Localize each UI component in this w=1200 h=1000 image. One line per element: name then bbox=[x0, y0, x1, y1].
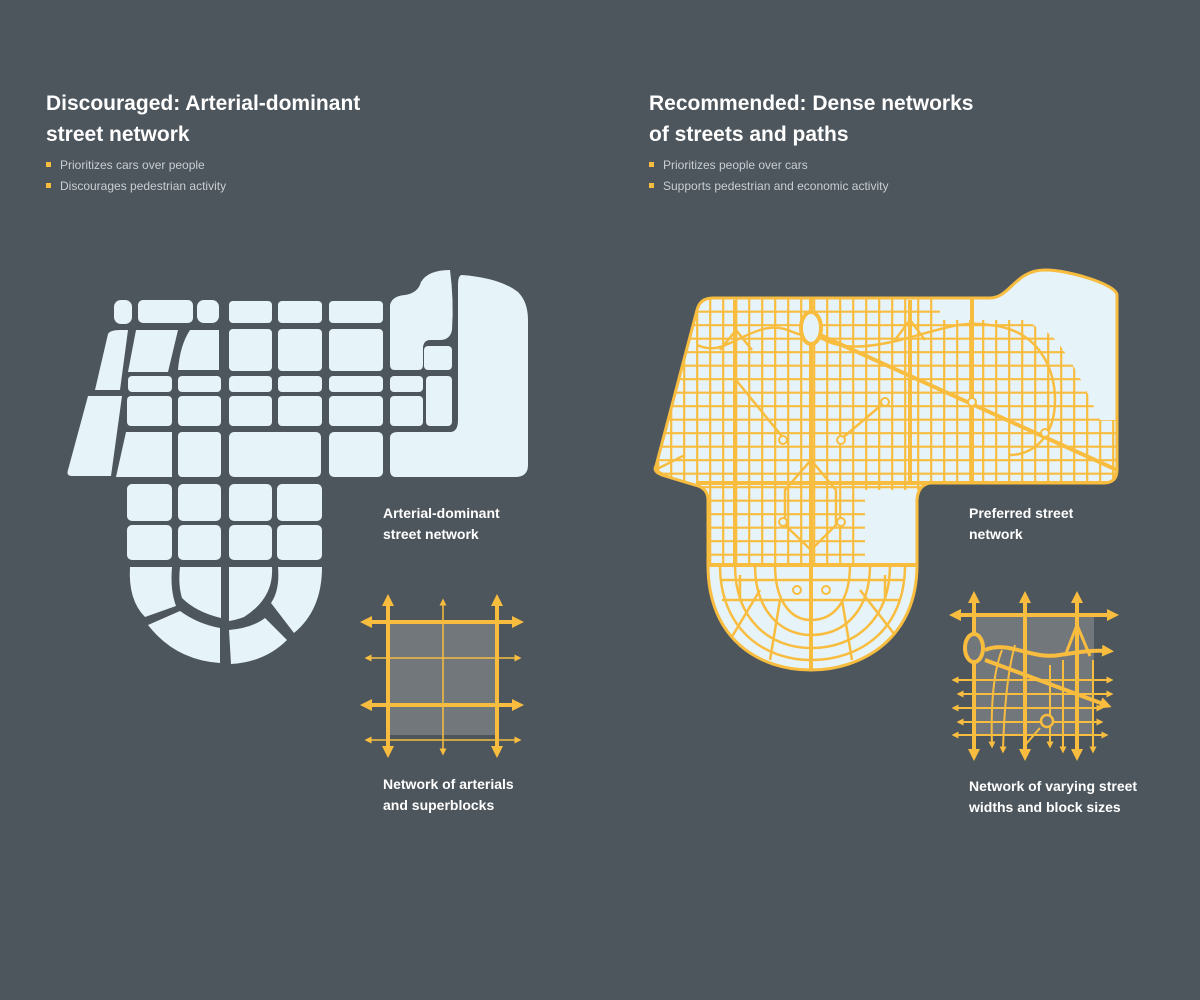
label: preferred street network: Preferred street bbox=[969, 505, 1073, 521]
bullets: recommended bbox=[649, 158, 888, 193]
title: discouraged bbox=[46, 92, 360, 146]
label: arterial-dominant bbox=[383, 505, 500, 542]
label: arterial-dominant: Arterial-dominant bbox=[383, 505, 500, 521]
label: preferred street network: network bbox=[969, 526, 1023, 542]
title: recommended: of streets and paths bbox=[649, 123, 849, 146]
bullets: discouraged: Prioritizes cars over people bbox=[60, 158, 205, 172]
label: arterials and superblocks bbox=[383, 776, 514, 813]
diagram: arterials and superblocks bbox=[366, 600, 518, 752]
label: varying street widths: Network of varying street bbox=[969, 778, 1137, 794]
bullets: recommended: Prioritizes people over cars bbox=[663, 158, 808, 172]
label: preferred street network bbox=[969, 505, 1074, 542]
title: recommended bbox=[649, 92, 973, 146]
label: arterial-dominant: street network bbox=[383, 526, 479, 542]
label: varying street widths bbox=[969, 778, 1137, 815]
bullets: discouraged bbox=[46, 158, 226, 193]
diagram: varying street widths bbox=[955, 597, 1113, 755]
title: discouraged: street network bbox=[46, 123, 190, 146]
title: recommended: Recommended: Dense networks bbox=[649, 92, 973, 115]
bullets: recommended: Supports pedestrian and economic activity bbox=[663, 179, 888, 193]
label: arterials and superblocks: and superblocks bbox=[383, 797, 494, 813]
title: discouraged: Discouraged: Arterial-dominant bbox=[46, 92, 360, 115]
label: varying street widths: widths and block sizes bbox=[969, 799, 1121, 815]
map: arterial-dominant blocks bbox=[68, 270, 528, 664]
map: preferred street network bbox=[654, 268, 1118, 672]
label: arterials and superblocks: Network of arterials bbox=[383, 776, 514, 792]
bullets: discouraged: Discourages pedestrian activity bbox=[60, 179, 226, 193]
